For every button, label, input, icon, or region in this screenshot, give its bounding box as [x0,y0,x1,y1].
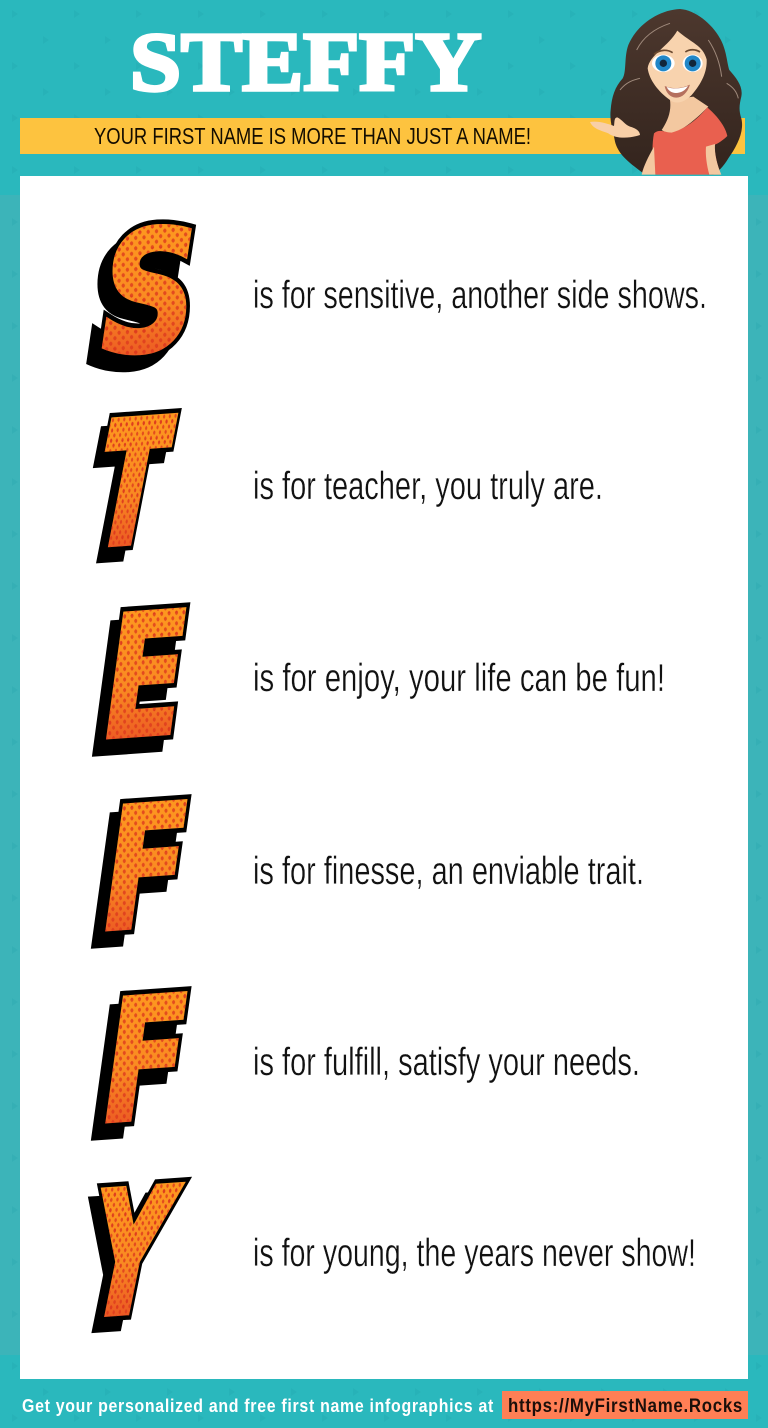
decorative letter Y: Y [85,1155,182,1351]
eyebrows [654,50,700,54]
decorative letter F: F [105,769,187,969]
decorative letter S: S [102,194,197,393]
decorative letter E: E [105,578,186,778]
decorative letter Y: Y [85,1155,182,1351]
decorative letter F: F [94,781,176,982]
decorative letter T: T [93,387,177,582]
decorative letter T: T [93,387,177,582]
neck and chest [662,97,708,135]
footer call to action: Get your personalized and free first name infographics at [22,1396,494,1416]
footer url badge [502,1391,748,1419]
decorative letter Y: Y [85,1155,182,1351]
decorative letter F: F [105,961,187,1161]
decorative letter E: E [95,591,176,790]
hand [590,117,640,138]
decorative letter S: S [102,194,197,393]
decorative letter F: F [94,973,176,1174]
T description: is for teacher, you truly are. [253,465,603,508]
hair highlights [620,23,738,98]
decorative letter E: E [105,578,186,778]
decorative letter E: E [105,578,186,778]
decorative letter S: S [102,194,197,393]
banner tagline text: YOUR FIRST NAME IS MORE THAN JUST A NAME! [94,123,531,149]
letter F row 1 [94,769,644,982]
decorative letter F: F [105,961,187,1161]
white content panel [20,176,748,1379]
right arm [706,144,721,175]
decorative letter F: F [105,769,187,969]
footer url badge: https://MyFirstName.Rocks [508,1396,743,1417]
face [648,31,707,103]
coral top [653,107,727,175]
decorative letter Y: Y [76,1167,172,1364]
yellow tagline banner [20,118,745,154]
letter S row [90,194,707,406]
decorative letter F: F [105,961,187,1161]
letter T row [84,387,603,594]
decorative letter F: F [105,769,187,969]
letter F row 2 [94,961,640,1174]
eyes [652,55,703,72]
hair [610,9,742,175]
decorative letter S: S [90,207,185,406]
icon: cartoon woman with long brown hair [590,9,742,175]
decorative letter T: T [93,387,177,582]
letter E row [95,578,665,790]
smile [665,85,690,98]
F description: finesse: is for finesse, an enviable trait. [253,850,644,893]
F description: fulfill: is for fulfill, satisfy your needs. [253,1041,640,1084]
decorative letter T: T [84,400,168,594]
left arm [642,147,655,175]
title: STEFFY: STEFFY [130,16,481,108]
letter Y row [76,1155,696,1364]
